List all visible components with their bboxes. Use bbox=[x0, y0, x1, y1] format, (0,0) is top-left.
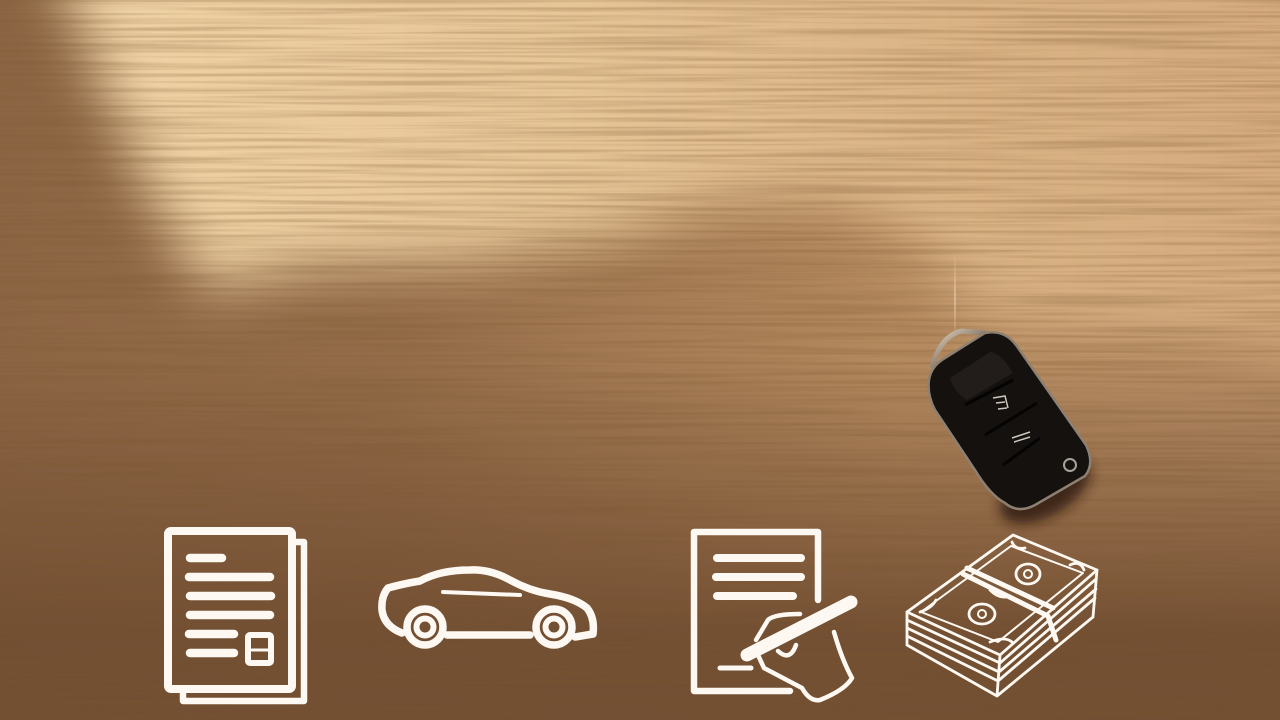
car key fob bbox=[929, 331, 1101, 538]
icon: signing contract bbox=[694, 532, 852, 700]
icon: car bbox=[382, 570, 593, 645]
key ring loop bbox=[932, 331, 986, 368]
hand bbox=[756, 614, 852, 700]
key shadow bbox=[989, 442, 1101, 538]
key button glyphs bbox=[993, 396, 1030, 442]
key button top bbox=[950, 352, 1013, 400]
key button lines bbox=[965, 380, 1040, 465]
money bands bbox=[963, 568, 1056, 640]
car wheels bbox=[407, 609, 572, 645]
key body bbox=[929, 332, 1090, 509]
key logo bbox=[1064, 459, 1076, 471]
icon: documents bbox=[168, 531, 304, 701]
inner note borders bbox=[921, 546, 1083, 642]
icon: stack of money bbox=[907, 535, 1097, 696]
document stamp bbox=[248, 635, 271, 663]
pen bbox=[747, 602, 851, 655]
money emblems bbox=[969, 604, 995, 624]
